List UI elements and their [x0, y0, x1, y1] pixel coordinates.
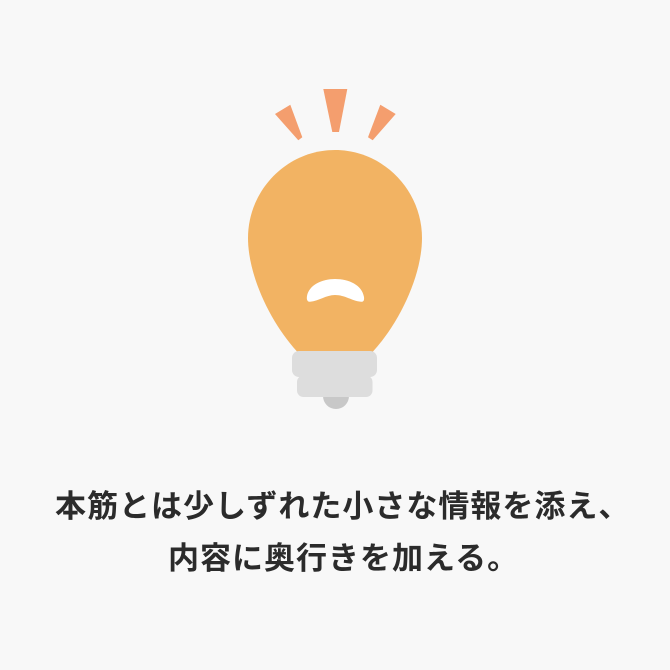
- caption text: [55, 489, 630, 576]
- caption line 2: 内容に奥行きを加える。: [168, 541, 519, 576]
- caption line 1: 本筋とは少しずれた小さな情報を添え、: [55, 489, 630, 524]
- icon: spark rays: [275, 89, 396, 140]
- bulb glass: [248, 150, 422, 352]
- bulb screw base: [292, 351, 377, 409]
- bulb highlight: [307, 279, 364, 302]
